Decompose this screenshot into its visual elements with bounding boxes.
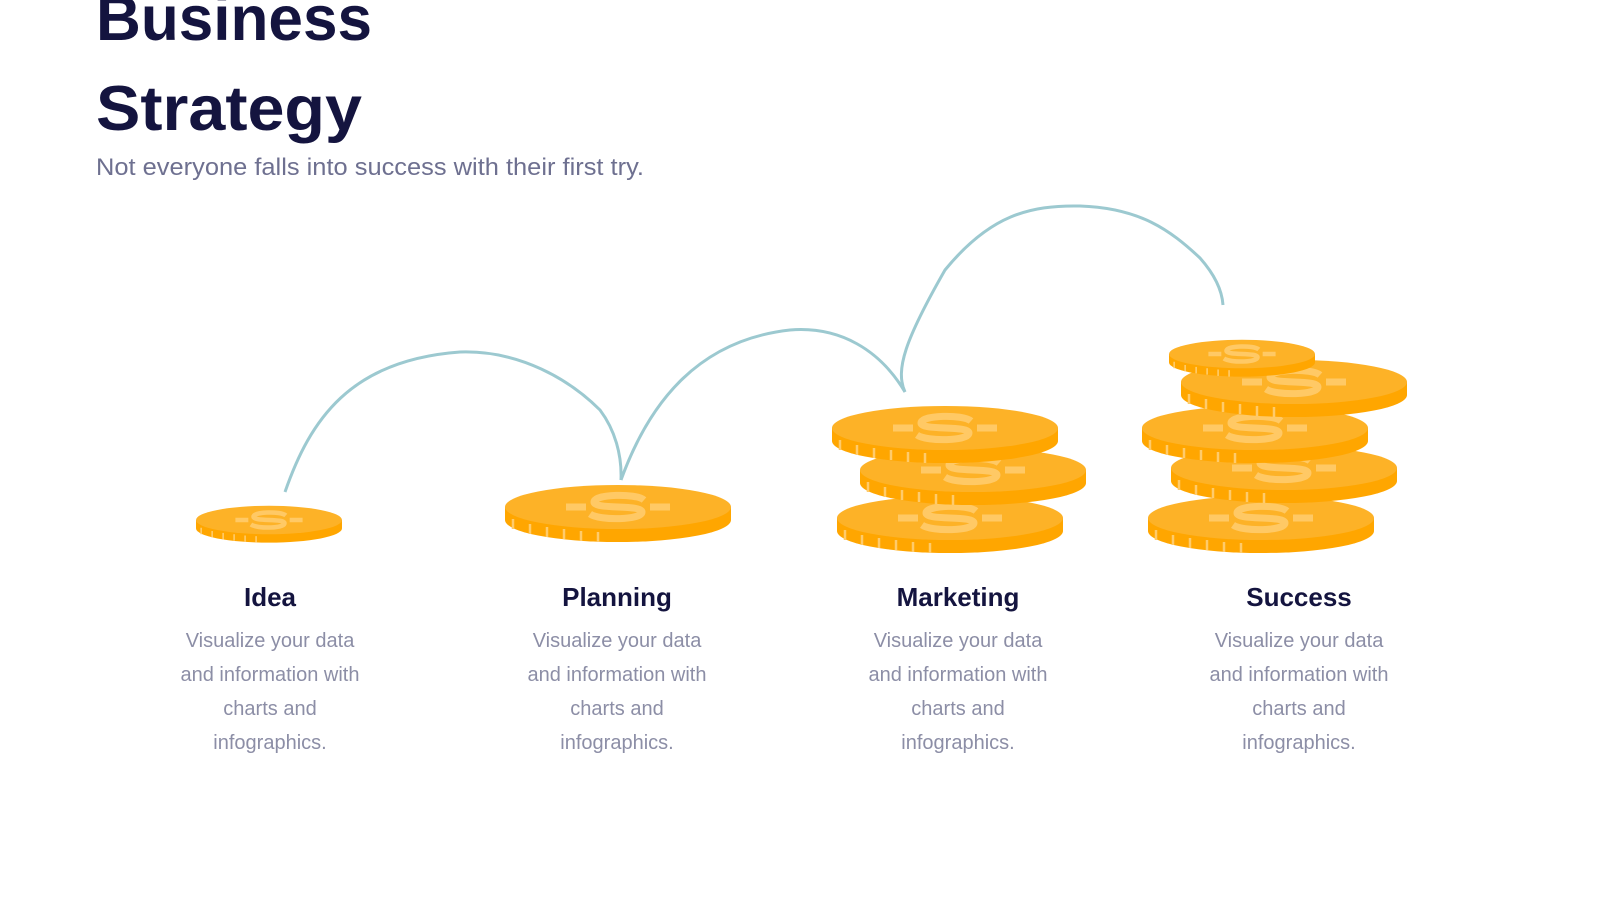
step descriptions: infographics. <box>213 732 327 754</box>
icon: idea coin <box>196 506 342 543</box>
title: Strategy <box>96 74 362 144</box>
step labels: Marketing <box>897 582 1019 612</box>
step descriptions: and information with <box>869 664 1047 686</box>
title <box>96 0 372 144</box>
step descriptions: charts and <box>1252 698 1346 720</box>
step descriptions: Visualize your data <box>186 630 355 652</box>
step descriptions: and information with <box>528 664 706 686</box>
step labels: Idea <box>244 582 297 612</box>
step descriptions: and information with <box>1210 664 1388 686</box>
subtitle: Not everyone falls into success with their first try. <box>96 154 644 181</box>
step labels <box>244 582 1352 612</box>
step descriptions: and information with <box>181 664 359 686</box>
step descriptions: Visualize your data <box>874 630 1043 652</box>
step descriptions: charts and <box>223 698 317 720</box>
step labels: Success <box>1246 582 1352 612</box>
step descriptions: infographics. <box>901 732 1015 754</box>
icon: marketing coins <box>832 406 1086 553</box>
step descriptions <box>181 630 1388 754</box>
step descriptions: charts and <box>911 698 1005 720</box>
icon: planning coin <box>505 485 731 542</box>
step labels: Planning <box>562 582 672 612</box>
icon: success coins <box>1142 340 1407 553</box>
step descriptions: Visualize your data <box>533 630 702 652</box>
step descriptions: infographics. <box>560 732 674 754</box>
step descriptions: charts and <box>570 698 664 720</box>
step descriptions: Visualize your data <box>1215 630 1384 652</box>
arrows: jump curves <box>285 206 1223 492</box>
step descriptions: infographics. <box>1242 732 1356 754</box>
